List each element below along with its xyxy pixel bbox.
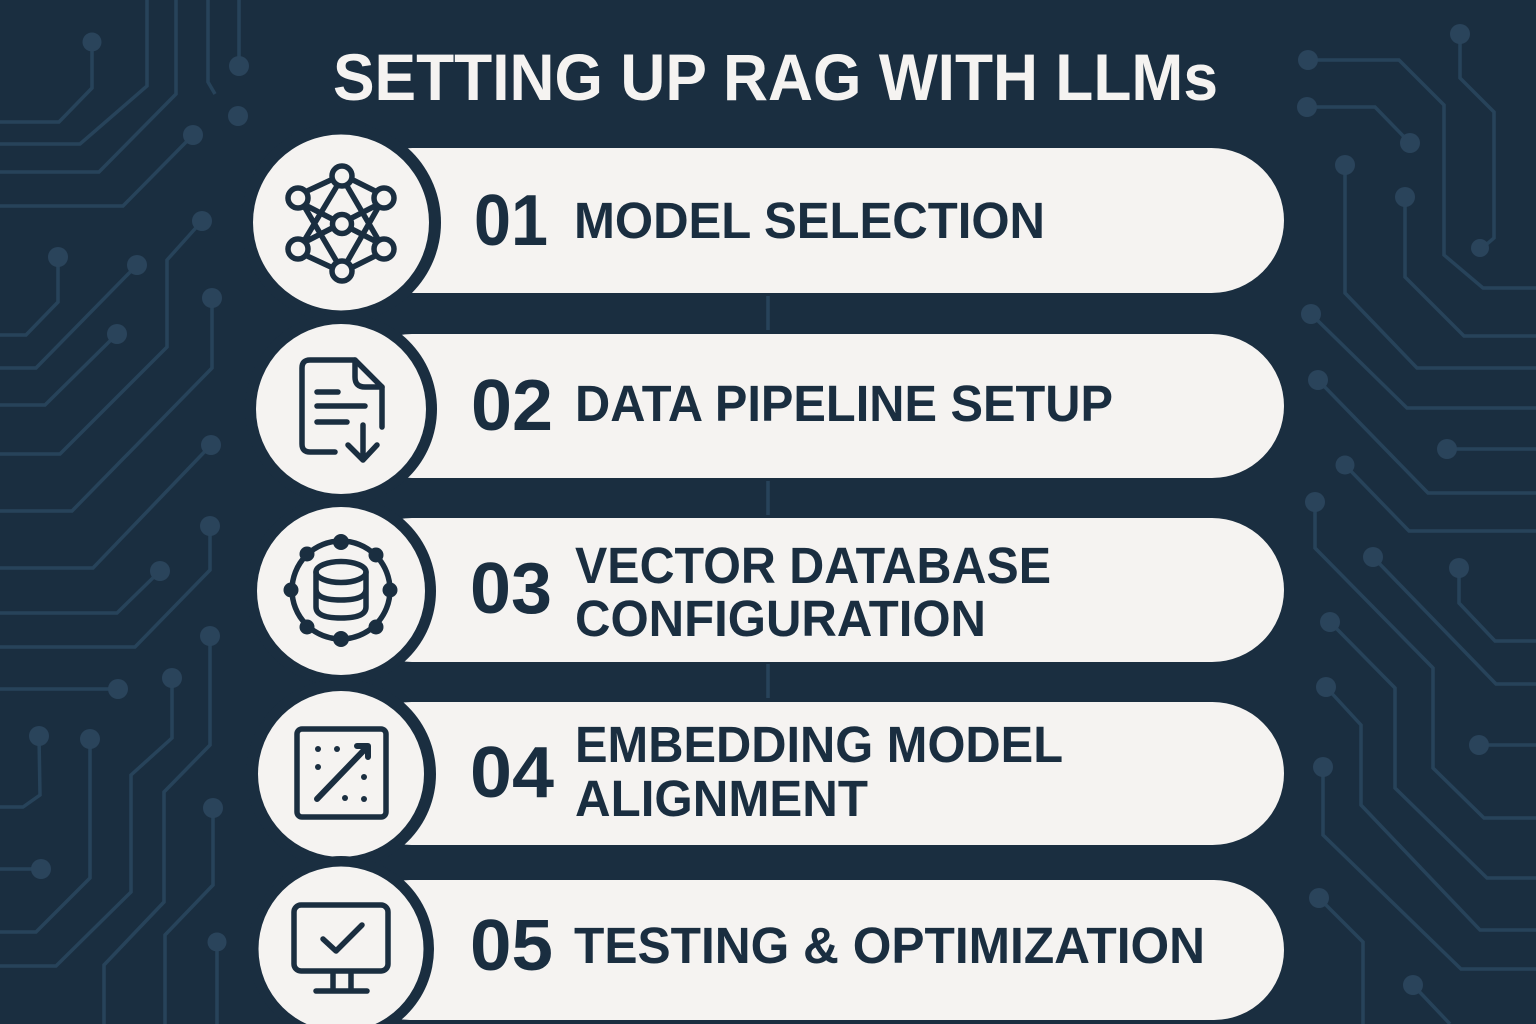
label: data pipeline setup: DATA PIPELINE SETUP bbox=[575, 375, 1113, 432]
panel: step 05 testing and optimization bbox=[248, 856, 1284, 1024]
icon: monitor with check mark bbox=[294, 905, 388, 991]
label: testing and optimization: TESTING & OPTIMIZATION bbox=[574, 917, 1205, 974]
label: vector database configuration: CONFIGURATION bbox=[575, 590, 986, 647]
icon badge 01 bbox=[241, 122, 441, 322]
title: SETTING UP RAG WITH LLMs bbox=[333, 40, 1218, 114]
number 02: 02 bbox=[471, 366, 553, 446]
panel: step 04 embedding model alignment bbox=[246, 679, 1284, 869]
panel: step 03 vector database configuration bbox=[246, 496, 1284, 686]
label: embedding model alignment bbox=[575, 716, 1063, 827]
pill background 04 bbox=[340, 702, 1284, 845]
icon badge 02 bbox=[245, 313, 437, 505]
pill background 05 bbox=[340, 880, 1284, 1020]
pill background 03 bbox=[340, 518, 1284, 662]
icon: embedding scatter with arrow bbox=[297, 729, 386, 817]
pill background 02 bbox=[340, 334, 1284, 478]
number 04: 04 bbox=[470, 733, 554, 813]
label: model selection: MODEL SELECTION bbox=[574, 192, 1045, 249]
icon: neural network bbox=[288, 166, 394, 281]
label: embedding model alignment: ALIGNMENT bbox=[575, 770, 868, 827]
number 03: 03 bbox=[470, 549, 552, 629]
label: vector database configuration bbox=[575, 537, 1051, 647]
pill background 01 bbox=[340, 148, 1284, 293]
panel: step 02 data pipeline setup bbox=[245, 313, 1284, 505]
number 01: 01 bbox=[474, 181, 548, 261]
icon badge 04 bbox=[246, 679, 436, 869]
label: vector database configuration: VECTOR DATABASE bbox=[575, 537, 1051, 594]
icon badge 03 bbox=[246, 496, 436, 686]
icon badge 05 bbox=[248, 856, 434, 1024]
panel: step 01 model selection bbox=[241, 122, 1284, 322]
number 05: 05 bbox=[470, 906, 553, 986]
icon: document with download arrow bbox=[302, 360, 382, 460]
label: embedding model alignment: EMBEDDING MODEL bbox=[575, 716, 1063, 773]
icon: database with ring of nodes bbox=[284, 534, 398, 647]
